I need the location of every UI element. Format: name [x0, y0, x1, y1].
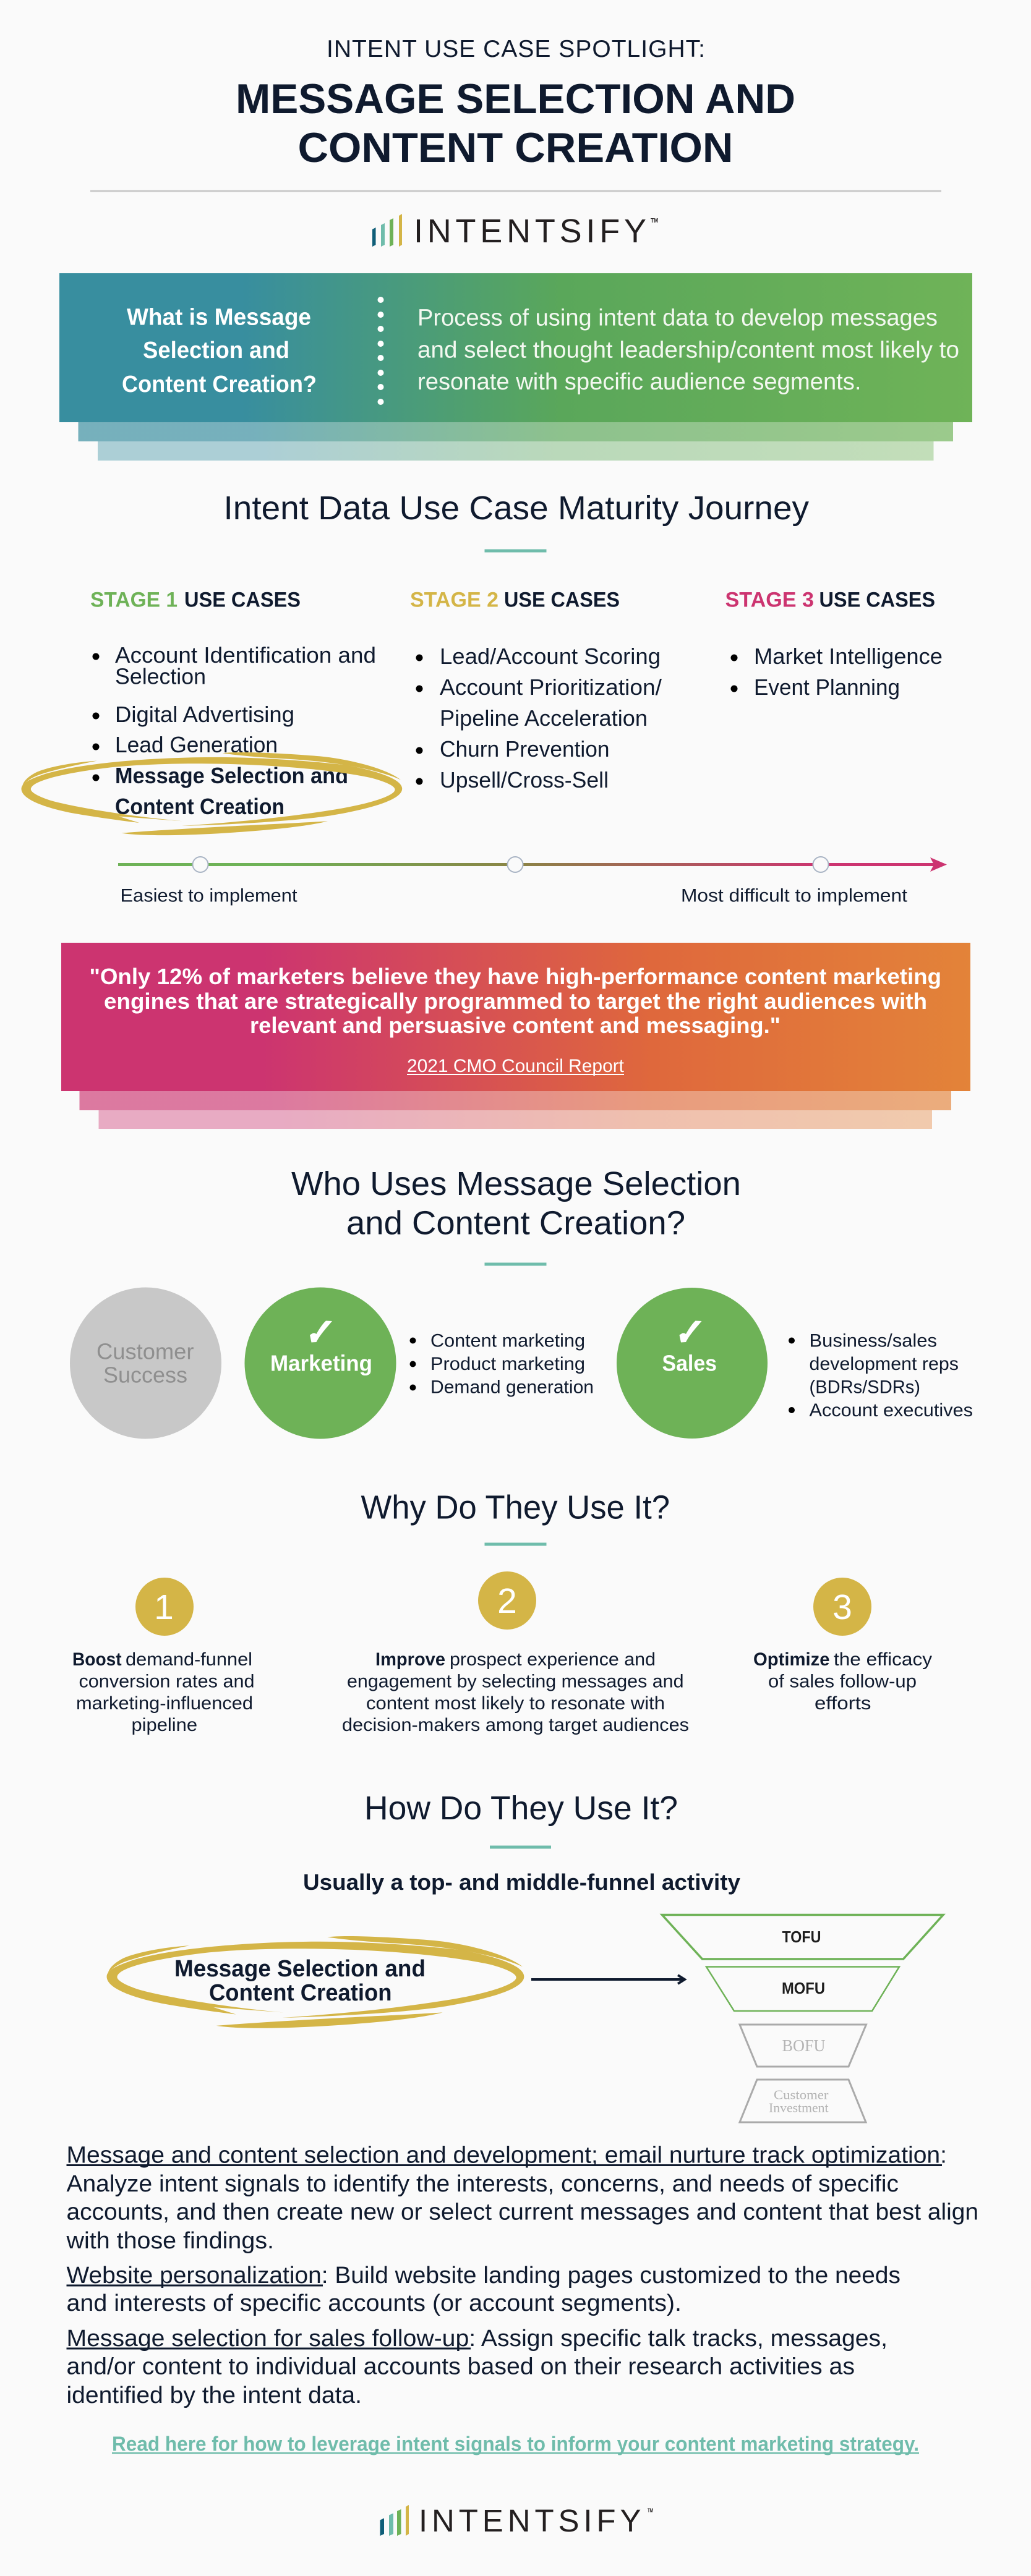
funnel: customer investment: Investment: [769, 2101, 829, 2115]
reason 3: [753, 1578, 932, 1714]
circle: sales: [617, 1288, 768, 1439]
reason 2 text: [342, 1649, 689, 1735]
heading: who uses: [291, 1165, 741, 1266]
stage 1 heading: [90, 589, 301, 612]
circle: customer success: Success: [103, 1362, 187, 1387]
stage 2 list: [416, 644, 662, 793]
stage 3 list: [731, 644, 943, 700]
panel question: [122, 304, 317, 397]
funnel: TOFU: [662, 1915, 943, 1959]
stage 2 list: Upsell/Cross-Sell: [440, 767, 609, 793]
icon: check mark: [310, 1320, 332, 1343]
use 1: message and content selection: [66, 2143, 978, 2254]
circle: customer success: Customer: [96, 1339, 194, 1364]
column: stage 1 use cases: [90, 589, 376, 819]
list: marketing roles: Demand generation: [430, 1377, 594, 1397]
use 3: message selection for sales: Message selection for sales follow-up: Assign specific talk tracks, messages,: [67, 2326, 888, 2352]
funnel: MOFU: [706, 1967, 899, 2011]
stage 3 heading: [725, 589, 935, 612]
circle: marketing: [245, 1287, 396, 1439]
use 1: message and content selection: Message and content selection and development; email nurture track optimization:: [67, 2143, 947, 2169]
dotted divider: [377, 297, 383, 405]
stage 2 list: Pipeline Acceleration: [440, 705, 648, 731]
panel question: Selection and: [143, 338, 289, 363]
reason 1 text: marketing-influenced: [76, 1693, 253, 1714]
reason 1 text: demand-funnel: [126, 1649, 252, 1670]
heading: why do they use it: Why Do They Use It?: [361, 1489, 670, 1526]
stage 1 list: Content Creation: [115, 794, 284, 819]
main title: MESSAGE SELECTION AND: [236, 75, 795, 122]
stage 1 list: Selection: [115, 664, 206, 689]
heading: how do they use it: [364, 1790, 678, 1848]
panel: CMO Council quote: [61, 943, 970, 1129]
main title: CONTENT CREATION: [298, 124, 734, 171]
eyebrow: INTENT USE CASE SPOTLIGHT:: [327, 36, 705, 62]
panel: what is message selection: [59, 273, 972, 461]
list: marketing roles: [409, 1330, 594, 1397]
logo: Intentsify bottom: TM: [648, 2507, 653, 2514]
heading: maturity journey: Intent Data Use Case Maturity Journey: [224, 490, 809, 527]
reason 3 text: efforts: [815, 1693, 871, 1714]
funnel diagram: [662, 1915, 943, 2122]
quote text: engines that are strategically programmed to target the right audiences with: [104, 988, 927, 1014]
panel definition: resonate with specific audience segments.: [417, 369, 861, 395]
heading: who uses: and Content Creation?: [346, 1204, 685, 1241]
scribble callout: message selection: [107, 1936, 524, 2028]
icon: check mark: [679, 1320, 701, 1343]
stage 2 heading: STAGE 2: [410, 589, 498, 612]
heading: maturity journey: [224, 490, 809, 553]
scribble callout: message selection: Content Creation: [209, 1980, 392, 2006]
stage 3 list: Market Intelligence: [754, 644, 943, 669]
circle: sales: Sales: [662, 1350, 717, 1376]
stage 2 heading: [410, 589, 620, 612]
quote source: 2021 CMO Council Report: [407, 1056, 625, 1076]
number badge 3: 3: [832, 1588, 852, 1627]
reason 1: [72, 1578, 255, 1735]
panel question: What is Message: [127, 304, 311, 330]
timeline: implementation difficulty: Easiest to implement: [120, 885, 297, 906]
reason 1 text: pipeline: [131, 1715, 197, 1735]
funnel: BOFU: BOFU: [782, 2036, 825, 2055]
use 1: message and content selection: accounts, and then create new or select current messages and content that best align: [67, 2200, 978, 2225]
quote text: "Only 12% of marketers believe they have high-performance content marketing: [89, 964, 941, 989]
panel definition: and select thought leadership/content most likely to: [417, 338, 959, 363]
list: sales roles: Account executives: [809, 1400, 973, 1421]
reason 1 text: [72, 1649, 255, 1735]
reason 2: [342, 1571, 689, 1735]
circle: marketing: Marketing: [270, 1350, 372, 1376]
reason 3 text: the efficacy: [834, 1649, 932, 1670]
number badge 3: [813, 1578, 871, 1636]
list: marketing roles: Product marketing: [430, 1354, 585, 1374]
list: sales roles: development reps: [809, 1354, 959, 1374]
heading: why do they use it: [361, 1489, 670, 1545]
list: marketing roles: Content marketing: [430, 1330, 585, 1351]
stage 1 heading: STAGE 1: [90, 589, 178, 612]
stage 2 list: Account Prioritization/: [440, 674, 662, 700]
stage 1 list: Message Selection and: [115, 763, 348, 788]
heading: how do they use it: How Do They Use It?: [364, 1790, 678, 1827]
number badge 1: [135, 1578, 194, 1636]
reason 2 text: content most likely to resonate with: [366, 1693, 665, 1714]
header: title block: [90, 36, 941, 192]
quote text: relevant and persuasive content and messaging.": [250, 1013, 781, 1038]
stage 2 list: Lead/Account Scoring: [440, 644, 661, 669]
reason 2 text: prospect experience and: [450, 1649, 656, 1670]
panel definition: Process of using intent data to develop messages: [417, 305, 938, 331]
stage 1 heading: USE CASES: [184, 589, 301, 612]
use 3: message selection for sales: and/or content to individual accounts based on their research activities as: [67, 2354, 855, 2380]
list: sales roles: [789, 1330, 973, 1421]
list: sales roles: (BDRs/SDRs): [809, 1377, 920, 1397]
reason 3 text: [753, 1649, 932, 1714]
circle: customer success: [70, 1287, 221, 1439]
stage 1 list: Digital Advertising: [115, 702, 294, 727]
use 1: message and content selection: with those findings.: [66, 2228, 274, 2254]
text block: how it is used: [66, 2143, 978, 2408]
stage 2 heading: USE CASES: [504, 589, 620, 612]
logo: Intentsify bottom: INTENTSIFY: [419, 2503, 641, 2538]
use 2: website personalization: and interests of specific accounts (or account segments).: [67, 2290, 682, 2316]
scribble callout: message selection: Message Selection and: [174, 1956, 426, 1982]
reason 2 text: decision-makers among target audiences: [342, 1715, 689, 1735]
subheading: funnel activity: Usually a top- and middle-funnel activity: [303, 1869, 740, 1895]
stage 1 list: [93, 642, 376, 819]
funnel: BOFU: [740, 2025, 866, 2067]
link: read here: Read here for how to leverage intent signals to inform your content marketing strategy.: [112, 2432, 919, 2455]
logo: Intentsify top: INTENTSIFY: [414, 213, 646, 250]
column: stage 2 use cases: [410, 589, 662, 793]
stage 1 list: Account Identification and: [115, 642, 376, 668]
funnel: MOFU: MOFU: [782, 1979, 825, 1997]
reason 3 text: of sales follow-up: [768, 1672, 917, 1691]
main title: [236, 75, 795, 171]
reason 3 text: Optimize: [753, 1649, 830, 1670]
use 2: website personalization: Website personalization: Build website landing pages customized to the needs: [67, 2263, 901, 2289]
reason 2 text: Improve: [375, 1649, 445, 1670]
stage 3 list: Event Planning: [754, 674, 900, 700]
stage 2 list: Churn Prevention: [440, 736, 610, 762]
panel definition: [417, 305, 959, 395]
stage 3 heading: STAGE 3: [725, 589, 814, 612]
funnel: customer investment: Customer: [774, 2087, 829, 2102]
number badge 1: 1: [154, 1588, 174, 1627]
use 3: message selection for sales: [67, 2326, 888, 2408]
reason 2 text: engagement by selecting messages and: [347, 1672, 684, 1691]
reason 1 text: Boost: [72, 1649, 122, 1670]
logo: Intentsify top: TM: [651, 218, 658, 224]
stage 1 list: Lead Generation: [115, 732, 278, 757]
use 1: message and content selection: Analyze intent signals to identify the interests, concerns, and needs of specific: [67, 2171, 899, 2197]
heading: who uses: Who Uses Message Selection: [291, 1165, 741, 1202]
number badge 2: [478, 1571, 536, 1630]
arrow: to funnel: [531, 1975, 685, 1984]
column: stage 3 use cases: [725, 589, 943, 700]
reason 1 text: conversion rates and: [79, 1672, 255, 1691]
panel question: Content Creation?: [122, 372, 317, 397]
use 3: message selection for sales: identified by the intent data.: [67, 2383, 362, 2408]
list: sales roles: Business/sales: [809, 1330, 937, 1351]
number badge 2: 2: [497, 1581, 517, 1621]
timeline: implementation difficulty: Most difficult to implement: [681, 885, 908, 906]
stage 3 heading: USE CASES: [819, 589, 935, 612]
timeline: implementation difficulty: [118, 857, 947, 906]
use 2: website personalization: [67, 2263, 901, 2316]
funnel: customer investment: [740, 2080, 866, 2122]
quote text: [89, 964, 941, 1038]
scribble highlight: stage 1 item: [22, 752, 402, 835]
funnel: TOFU: TOFU: [782, 1928, 821, 1946]
